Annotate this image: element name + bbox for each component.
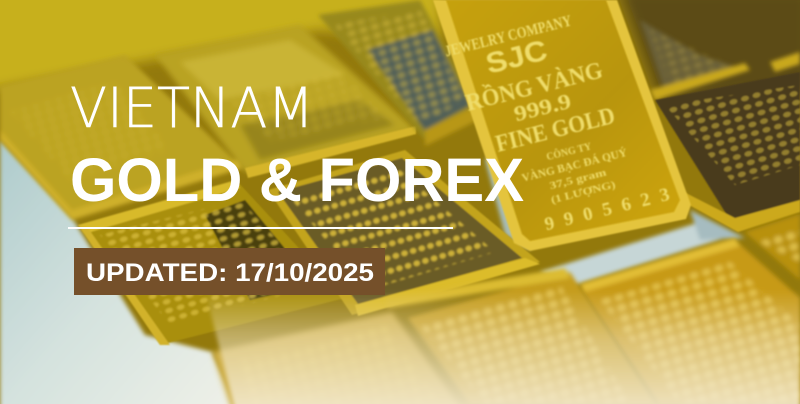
pale table, left side bbox=[0, 140, 240, 404]
bottom fade over the bars only bbox=[205, 290, 800, 404]
slivers of pale table bbox=[485, 130, 745, 285]
engraved inscription: 37,5 gram bbox=[548, 167, 608, 192]
engraved inscription: (1 LƯỢNG) bbox=[550, 179, 617, 206]
bar: bottom right bbox=[580, 238, 800, 404]
engraved inscription: 999.9 bbox=[511, 88, 574, 127]
engraved inscription: FINE GOLD bbox=[493, 103, 618, 158]
engraved inscription: JEWELRY COMPANY bbox=[443, 12, 574, 61]
engraved inscription: 9905623 bbox=[542, 184, 672, 235]
bar: bottom centre bbox=[385, 268, 655, 404]
divider line bbox=[68, 227, 453, 229]
title: GOLD & FOREX: GOLD & FOREX bbox=[70, 146, 524, 214]
date badge bbox=[74, 248, 385, 295]
engraved inscription: SJC bbox=[483, 35, 551, 81]
bar: bottom left bbox=[212, 312, 462, 404]
bar: top left bbox=[0, 55, 243, 220]
featured SJC gold bar bbox=[433, 0, 691, 251]
bar: right middle dark bbox=[655, 72, 800, 232]
bar: top centre bbox=[155, 25, 416, 172]
engraved inscription: VÀNG BẠC ĐÁ QUÝ bbox=[520, 145, 629, 185]
bar: middle left bbox=[78, 180, 345, 345]
date badge: UPDATED: 17/10/2025 bbox=[86, 259, 374, 287]
title: VIETNAM: VIETNAM bbox=[70, 76, 314, 140]
blurred back row bbox=[0, 0, 800, 100]
bar: right top dark bbox=[640, 20, 800, 100]
bar: right edge bbox=[745, 214, 800, 280]
engraved inscription: CÔNG TY bbox=[545, 139, 593, 163]
engraved inscription: RỒNG VÀNG bbox=[463, 57, 606, 117]
bar: middle centre bbox=[268, 150, 540, 316]
engraved inscription bbox=[443, 0, 672, 249]
bar: top right dark bbox=[318, 0, 482, 146]
